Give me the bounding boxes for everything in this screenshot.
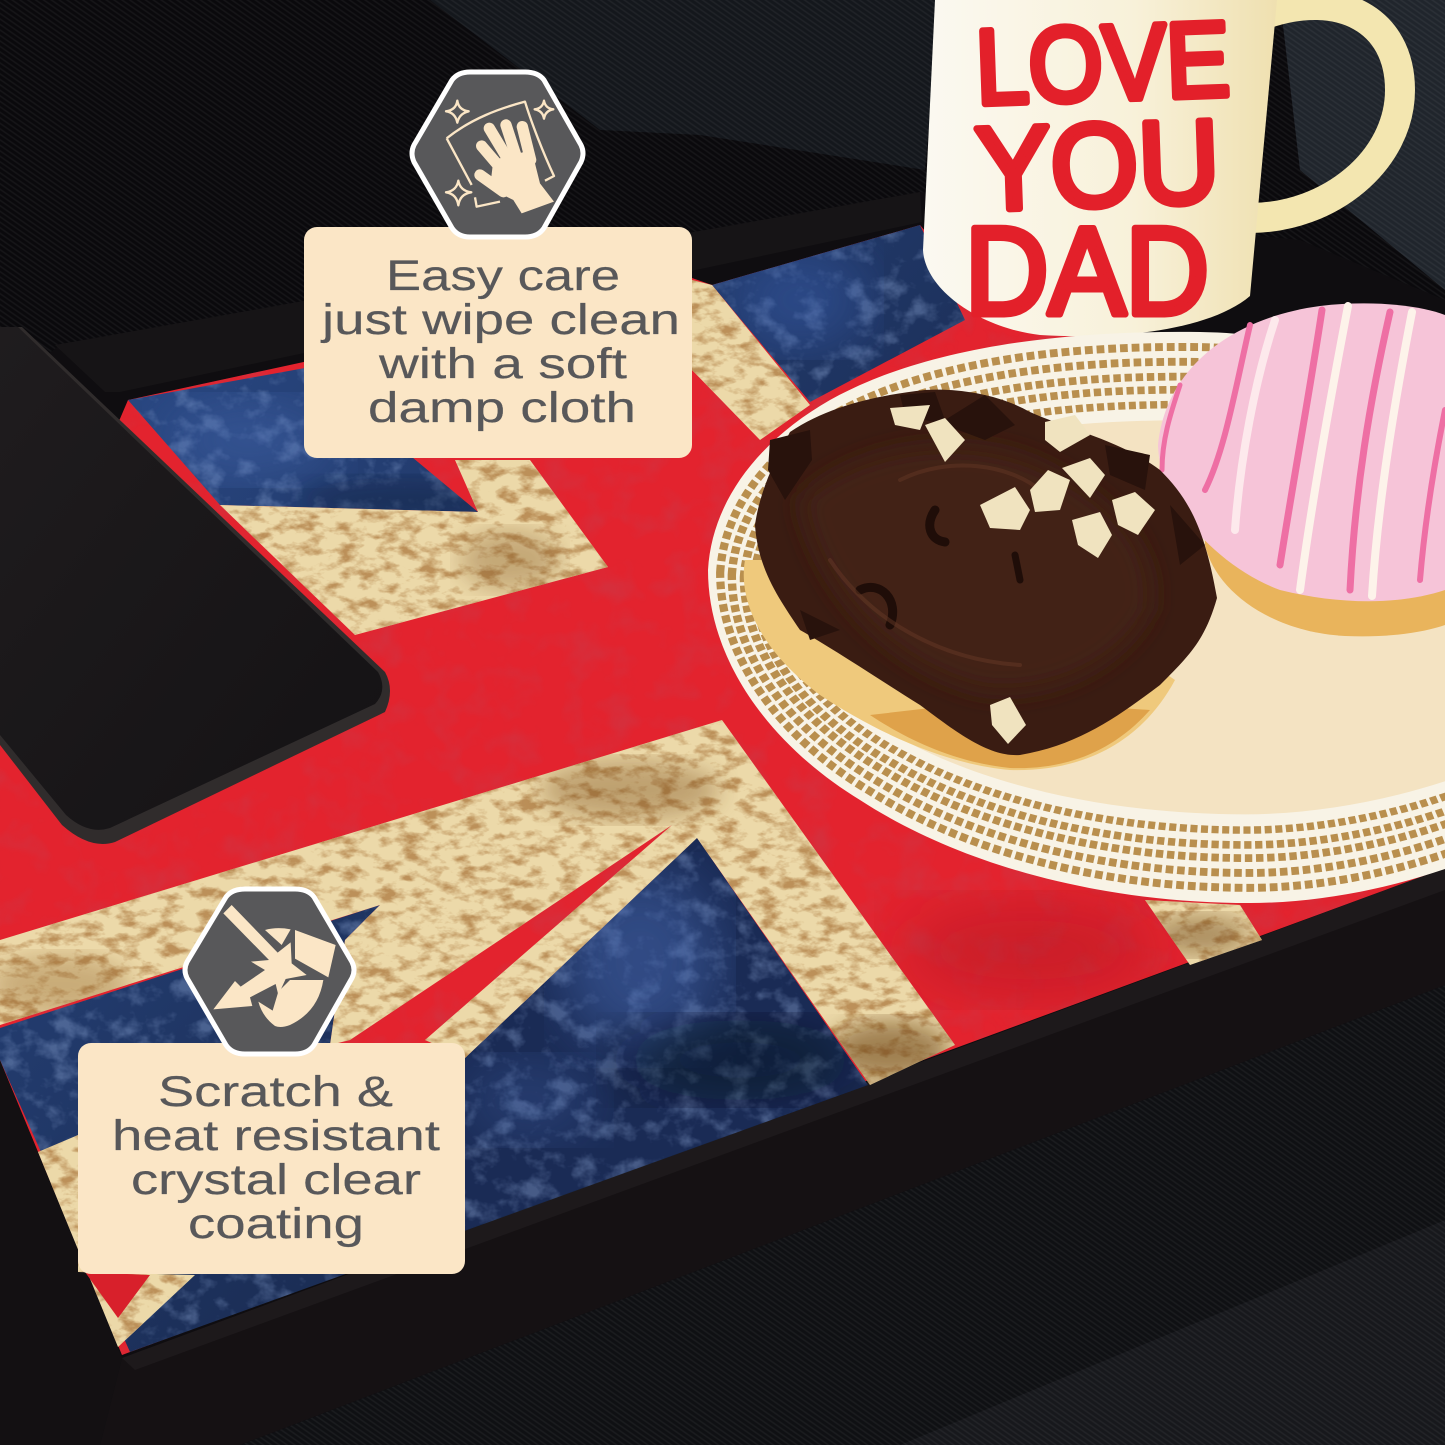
white chocolate pieces — [890, 405, 1155, 744]
easy care text: with a soft — [378, 340, 627, 388]
scratch text — [112, 1068, 440, 1248]
callout: easy care — [304, 72, 692, 458]
flag blue panels — [0, 225, 965, 1352]
flag bottom-left red — [85, 1272, 150, 1318]
tray mat: Union Jack print — [0, 225, 1428, 1355]
scratch text: coating — [188, 1200, 364, 1248]
icon: hand wiping cloth — [412, 72, 583, 237]
flag grunge on cream — [0, 280, 1262, 1347]
mug lettering: LOVE — [974, 0, 1232, 127]
pink donut base — [1205, 520, 1445, 636]
easy care text — [319, 252, 680, 432]
chocolate donut bread — [744, 560, 1175, 770]
easy care text: damp cloth — [368, 384, 636, 432]
chocolate donut — [744, 390, 1217, 770]
flag red field — [0, 225, 1445, 1355]
flag blue mottling — [0, 232, 965, 1343]
mug lettering: YOU — [973, 96, 1222, 236]
mug body — [923, 0, 1277, 336]
pink donut — [1158, 303, 1445, 636]
mug lettering: DAD — [965, 203, 1209, 341]
mug lettering — [965, 0, 1232, 341]
plate well — [779, 420, 1445, 814]
plate dotted rings — [720, 347, 1445, 888]
scratch text: heat resistant — [112, 1112, 440, 1160]
chocolate gloss and curls — [830, 466, 1040, 665]
flag cream bands — [0, 280, 1262, 1347]
callout: scratch resistant — [78, 889, 465, 1274]
pink donut stripes — [1162, 306, 1445, 596]
panel: easy care text box — [304, 227, 692, 458]
panel: scratch text box — [78, 1043, 465, 1274]
mug — [923, 0, 1400, 341]
phone — [0, 327, 390, 844]
mug handle — [1250, 5, 1400, 218]
chocolate icing — [755, 390, 1217, 755]
flag red mottling — [0, 314, 1344, 1026]
pink donut icing — [1158, 303, 1445, 601]
icon: shield deflecting arrow — [185, 889, 354, 1054]
easy care text: just wipe clean — [319, 296, 680, 344]
scratch text: crystal clear — [131, 1156, 421, 1204]
scratch text: Scratch & — [158, 1068, 393, 1116]
easy care text: Easy care — [386, 252, 620, 300]
plate — [708, 332, 1445, 903]
